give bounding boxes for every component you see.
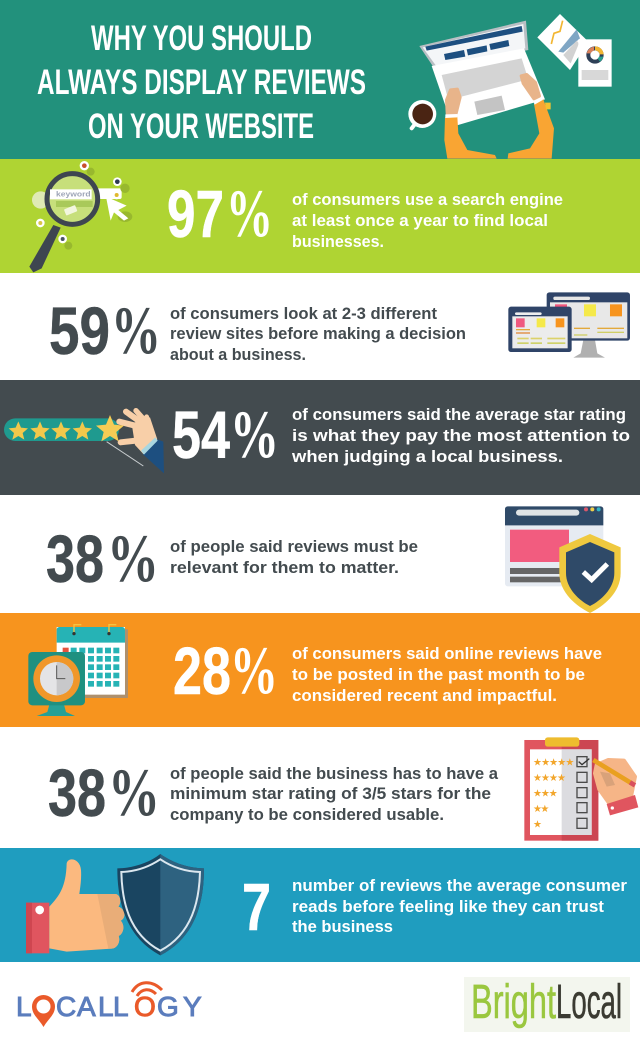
stat: 59% xyxy=(49,292,161,369)
text: 38% relevant description: of people said reviews must be xyxy=(170,538,418,556)
icon: desktop and browser windows xyxy=(508,292,630,358)
icon: magnifying glass with keyword search xyxy=(29,161,132,272)
text: 38% minimum description: company to be considered usable. xyxy=(170,806,444,824)
text: 28% description xyxy=(292,645,602,705)
icon: thumbs up and shield xyxy=(26,854,204,955)
text: 7 description: reads before feeling like they can trust xyxy=(292,898,605,916)
icon: browser window with security shield xyxy=(505,506,621,613)
stat: 54%: % xyxy=(230,396,279,472)
panel: 59% review sites xyxy=(49,292,630,369)
icon: clipboard star checklist with hand: ★★ xyxy=(533,804,549,815)
icon: clipboard star checklist with hand: ★★★ xyxy=(533,789,558,800)
text: 28% description: to be posted in the past month to be xyxy=(292,666,585,684)
text: 38% relevant description: relevant for them to matter. xyxy=(170,559,399,577)
panel: 54% star rating xyxy=(0,380,640,495)
stat: 38% minimum: 38 xyxy=(48,756,106,831)
text: 7 description xyxy=(292,877,628,936)
logo: Locallogy xyxy=(16,983,202,1027)
stat: 38% relevant xyxy=(46,520,159,597)
panel: 38% minimum star rating xyxy=(48,737,638,841)
logo: Locallogy: O xyxy=(134,991,156,1022)
text: 59% description xyxy=(170,305,466,364)
logo: Locallogy: L xyxy=(113,991,129,1022)
text: 54% description xyxy=(291,406,630,466)
text: 97% description: at least once a year to find local xyxy=(292,212,548,230)
text: 54% description: is what they pay the most attention to xyxy=(292,427,630,445)
text: 54% description: of consumers said the average star rating xyxy=(292,406,626,424)
text: 59% description: of consumers look at 2-3 different xyxy=(170,305,438,323)
logo: BrightLocal: Bright xyxy=(471,976,556,1029)
icon: calendar and clock xyxy=(28,625,128,716)
title: ON YOUR WEBSITE xyxy=(88,107,314,146)
icon: five star rating bar with hand xyxy=(4,411,164,473)
text: 54% description: when judging a local business. xyxy=(291,448,563,466)
stat: 54%: 54 xyxy=(172,398,230,473)
text: 7 description: the business xyxy=(292,918,393,936)
stat: 97% xyxy=(167,175,273,252)
icon: clipboard star checklist with hand: ★ xyxy=(533,820,542,831)
logo: Locallogy: L xyxy=(98,991,114,1022)
text: 38% relevant description xyxy=(170,538,418,577)
icon: clipboard star checklist with hand xyxy=(524,737,638,841)
title: WHY YOU SHOULD xyxy=(91,19,312,58)
text: 7 description: number of reviews the average consumer xyxy=(292,877,628,895)
text: 97% description: businesses. xyxy=(292,233,384,251)
icon: clipboard star checklist with hand: ★★★★ xyxy=(533,773,566,784)
text: 59% description: review sites before making a decision xyxy=(170,325,466,343)
stat: 7: 7 xyxy=(242,870,271,945)
text: 38% minimum description: minimum star rating of 3/5 stars for the xyxy=(170,785,491,803)
logo: Locallogy: C xyxy=(56,991,76,1022)
logo: Locallogy: A xyxy=(77,991,96,1022)
title: ALWAYS DISPLAY REVIEWS xyxy=(37,63,366,102)
panel: 97% search engine xyxy=(0,159,640,273)
logo: Locallogy: Y xyxy=(183,991,202,1022)
stat: 28%: 28 xyxy=(173,634,231,709)
header band xyxy=(0,0,640,159)
logo: Locallogy: O xyxy=(33,991,55,1022)
text: 97% description xyxy=(292,191,563,251)
text: 59% description: about a business. xyxy=(170,346,306,364)
logo: Locallogy: G xyxy=(157,991,179,1022)
stat: 59%: % xyxy=(111,292,161,368)
stat: 54% xyxy=(172,396,279,473)
icon: laptop, hands, coffee and reports xyxy=(408,14,612,159)
stat: 97%: % xyxy=(226,175,273,251)
stat: 38% minimum xyxy=(48,754,160,831)
text: 38% minimum description xyxy=(170,765,499,824)
stat: 97%: 97 xyxy=(167,177,224,252)
stat: 59%: 59 xyxy=(49,294,110,369)
text: 38% minimum description: of people said the business has to have a xyxy=(170,765,499,783)
text: 97% description: of consumers use a search engine xyxy=(292,191,563,209)
panel: 7 reviews before trust xyxy=(0,848,640,962)
stat: 38% minimum: % xyxy=(108,754,160,830)
logo: Locallogy: L xyxy=(16,991,32,1022)
stat: 28%: % xyxy=(230,632,278,708)
text: 28% description: considered recent and impactful. xyxy=(292,687,557,705)
panel: 28% recent reviews xyxy=(0,613,640,727)
title xyxy=(37,19,366,146)
stat: 38% relevant: % xyxy=(107,520,159,596)
panel: 38% relevant reviews xyxy=(46,506,621,613)
icon: magnifying glass with keyword search: keyword xyxy=(56,190,91,199)
icon: clipboard star checklist with hand: ★★★★★ xyxy=(533,758,574,769)
stat: 28% xyxy=(173,632,278,709)
stat: 38% relevant: 38 xyxy=(46,522,104,597)
text: 28% description: of consumers said online reviews have xyxy=(292,645,602,663)
